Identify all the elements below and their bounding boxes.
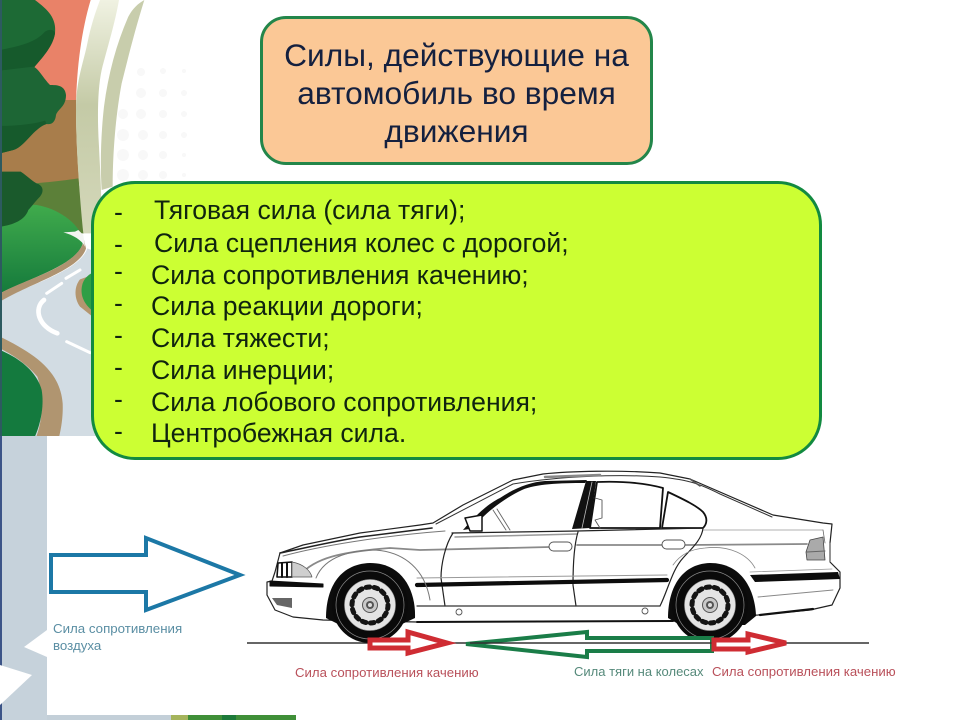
label: traction: Сила тяги на колесах (574, 664, 704, 679)
list text (114, 195, 569, 448)
car illustration (267, 471, 840, 643)
list text: - (114, 320, 123, 350)
list text: Сила реакции дороги; (151, 291, 423, 321)
list text: - (114, 352, 123, 382)
hood lines (280, 528, 432, 553)
quarter window (662, 492, 706, 528)
list text: - (114, 256, 123, 286)
ground line (247, 642, 869, 644)
list panel (91, 181, 822, 460)
wheel arches (316, 550, 430, 600)
label: air resistance (53, 621, 182, 653)
title box: Силы, действующие на (284, 37, 629, 73)
label: air resistance: Сила сопротивления (53, 621, 182, 636)
mirror (465, 515, 482, 531)
list text: Сила лобового сопротивления; (151, 387, 537, 417)
background: road landscape (0, 0, 296, 720)
faint dots (117, 68, 187, 181)
arrow: traction force (466, 632, 712, 657)
list text: - (114, 229, 123, 259)
decorative swoosh (76, 0, 119, 233)
B pillar (572, 481, 596, 529)
title box: движения (384, 113, 529, 149)
arrow: rear rolling resistance (714, 634, 786, 652)
list text: Сила сцепления колес с дорогой; (154, 228, 569, 258)
line through arrows (470, 642, 712, 644)
seats (493, 509, 510, 530)
list text: Сила инерции; (151, 355, 334, 385)
title box (260, 16, 653, 165)
handles (549, 542, 572, 551)
list text: - (114, 384, 123, 414)
arrow: air resistance (51, 538, 240, 610)
arrow: front rolling resistance (370, 632, 447, 653)
title box: автомобиль во время (297, 75, 616, 111)
body (267, 471, 840, 622)
list text: Сила сопротивления качению; (151, 260, 529, 290)
front wheel (332, 567, 408, 643)
list text: - (114, 288, 123, 318)
label: air resistance: воздуха (53, 638, 101, 653)
front window (482, 482, 586, 531)
rear wheel (672, 567, 748, 643)
label: rear rolling resistance: Сила сопротивления качению (712, 664, 896, 679)
roof lines (436, 476, 772, 524)
white photo panel (47, 436, 960, 715)
list text: Центробежная сила. (151, 418, 406, 448)
doors (441, 528, 703, 606)
belt line (452, 528, 703, 533)
lights (277, 562, 292, 577)
list text: Тяговая сила (сила тяги); (154, 195, 465, 225)
mouldings (417, 580, 667, 585)
list text: - (114, 197, 123, 227)
list text: Сила тяжести; (151, 323, 330, 353)
rear side window (590, 482, 663, 528)
list text: - (114, 416, 123, 446)
label: front rolling resistance: Сила сопротивления качению (295, 665, 479, 680)
